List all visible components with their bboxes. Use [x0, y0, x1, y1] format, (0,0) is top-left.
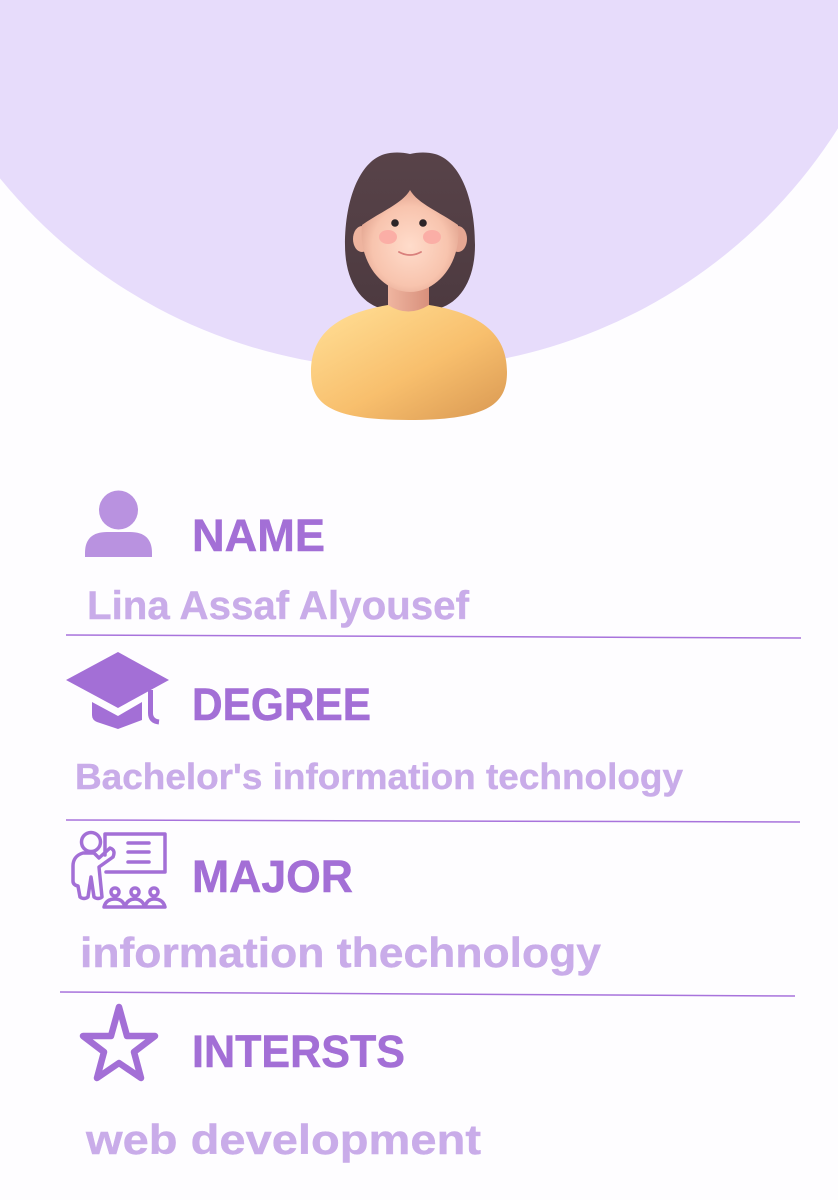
- avatar left cheek: [379, 230, 397, 244]
- value: degree: Bachelor's information technology: [75, 756, 683, 797]
- avatar smile: [399, 252, 421, 255]
- avatar illustration: [311, 152, 507, 420]
- avatar right cheek: [423, 230, 441, 244]
- icon: person: [85, 490, 152, 557]
- avatar right eye: [419, 219, 427, 227]
- heading: interests: INTERSTS: [192, 1026, 405, 1077]
- avatar sweater: [311, 305, 507, 420]
- avatar right ear: [449, 226, 467, 252]
- avatar face: [362, 190, 458, 292]
- heading: degree: DEGREE: [192, 679, 371, 730]
- heading: major: MAJOR: [192, 851, 353, 902]
- avatar left ear: [353, 226, 371, 252]
- icon: star: [83, 1007, 155, 1078]
- heading: name: NAME: [192, 510, 325, 561]
- value: major: information thechnology: [80, 929, 602, 976]
- avatar hair: [345, 152, 475, 308]
- icon: teacher and audience: [73, 832, 165, 907]
- background circle: [0, 0, 838, 369]
- icon: graduation cap: [66, 652, 169, 729]
- value: interests: web development: [85, 1116, 481, 1163]
- avatar left eye: [391, 219, 399, 227]
- value: name: Lina Assaf Alyousef: [87, 584, 470, 628]
- avatar neck: [388, 280, 429, 316]
